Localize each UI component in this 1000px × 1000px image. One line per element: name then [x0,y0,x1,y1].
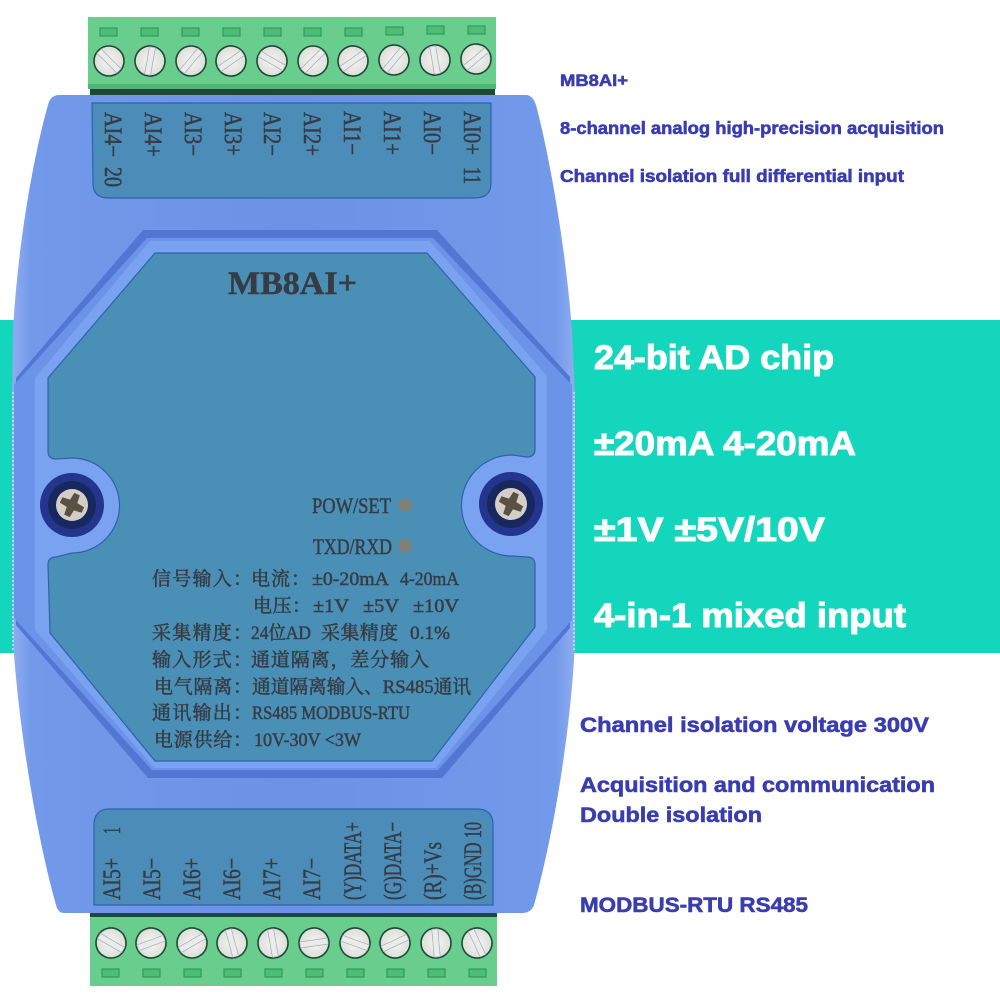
printed specifications: 24位AD [251,622,311,644]
top channel labels: 20 [99,167,126,187]
bottom channel labels: (Y)DATA+ [340,822,367,900]
top channel labels: AI0+ [458,111,485,155]
printed specifications: 0.1% [410,623,450,644]
bottom channel labels: (R)+Vs [420,842,447,900]
status indicators: POW/SET [312,493,391,518]
right mounting screw [479,472,543,536]
bottom channel labels: AI5+ [99,858,126,900]
top feature list: Channel isolation full differential input [560,166,904,186]
top channel labels: AI1+ [378,111,405,155]
top feature list: 8-channel analog high-precision acquisition [560,118,944,138]
top feature list: MB8AI+ [560,71,628,90]
bottom channel labels: AI7+ [259,858,286,900]
bottom terminal block [90,913,497,986]
bottom channel labels: 1 [99,827,126,834]
top channel labels: 11 [458,167,485,184]
bottom channel labels: AI5− [139,858,166,900]
printed specifications: ±0-20mA [312,569,389,590]
printed specifications: 电流： [251,568,310,590]
bottom channel labels: AI6− [219,858,246,900]
bottom terminal pin windows [102,969,486,977]
status indicators: TXD/RXD [313,534,392,559]
teal band headline specs: ±1V ±5V/10V [594,511,825,549]
printed specifications: 4-20mA [400,569,459,590]
lower feature list: Acquisition and communication [580,773,935,797]
top channel labels: AI3+ [219,112,246,156]
lower feature list: MODBUS-RTU RS485 [580,893,808,917]
printed specifications: RS485 MODBUS-RTU [252,703,410,724]
printed specifications: 通道隔离，差分输入 [251,649,429,671]
printed specifications: 电气隔离： [154,676,252,698]
printed specifications: ±1V [313,596,349,617]
printed specifications: 信号输入： [152,568,252,590]
top feature list [560,71,944,186]
lower feature list [580,713,935,917]
bottom channel label panel [94,809,493,905]
raised frame edge [16,230,570,778]
printed specifications: 通道隔离输入、RS485通讯 [252,676,471,698]
ribbed body edge [13,392,574,650]
teal band headline specs: 24-bit AD chip [594,339,834,377]
printed specifications: 采集精度： [152,622,252,644]
main label panel [48,253,535,761]
raised frame face [35,241,547,768]
top terminal block [88,17,497,96]
bottom channel labels: (G)DATA− [380,822,407,900]
top channel labels: AI1− [338,111,365,155]
printed specifications: 采集精度 [321,622,398,644]
top channel labels: AI2+ [298,112,325,156]
printed specifications: ±10V [413,596,459,617]
bottom channel labels: AI6+ [179,858,206,900]
printed specifications: 通讯输出： [152,702,252,724]
teal feature band [0,320,1000,653]
printed specifications: 电源供给： [154,729,252,751]
raised frame bevel [14,238,572,770]
top channel labels: AI4− [99,112,126,157]
printed specifications: 电压： [253,595,311,617]
teal band headline specs: ±20mA 4-20mA [594,425,856,463]
left mounting screw [40,473,104,537]
top channel labels: AI2− [258,112,285,156]
top channel labels: AI4+ [139,112,166,157]
top channel labels: AI0− [418,111,445,155]
bottom channel labels [99,822,487,900]
top terminal screws [88,38,497,82]
printed specifications [152,568,471,751]
model name on device: MB8AI+ [228,266,357,302]
bottom terminal screws [91,923,497,963]
printed specifications: 输入形式： [152,649,252,671]
lower feature list: Channel isolation voltage 300V [580,713,930,737]
top terminal pin windows [100,26,485,36]
top channel labels [99,111,485,187]
device body [12,95,575,913]
bottom channel labels: (B)GND 10 [460,822,487,900]
status indicators [312,493,412,559]
top channel labels: AI3− [179,112,206,156]
bottom channel labels: AI7− [299,858,326,900]
printed specifications: ±5V [363,596,399,617]
top channel label panel [92,103,491,198]
teal band headline specs [594,339,906,635]
printed specifications: 10V-30V <3W [254,730,361,751]
teal band headline specs: 4-in-1 mixed input [594,597,906,635]
lower feature list: Double isolation [580,803,762,827]
